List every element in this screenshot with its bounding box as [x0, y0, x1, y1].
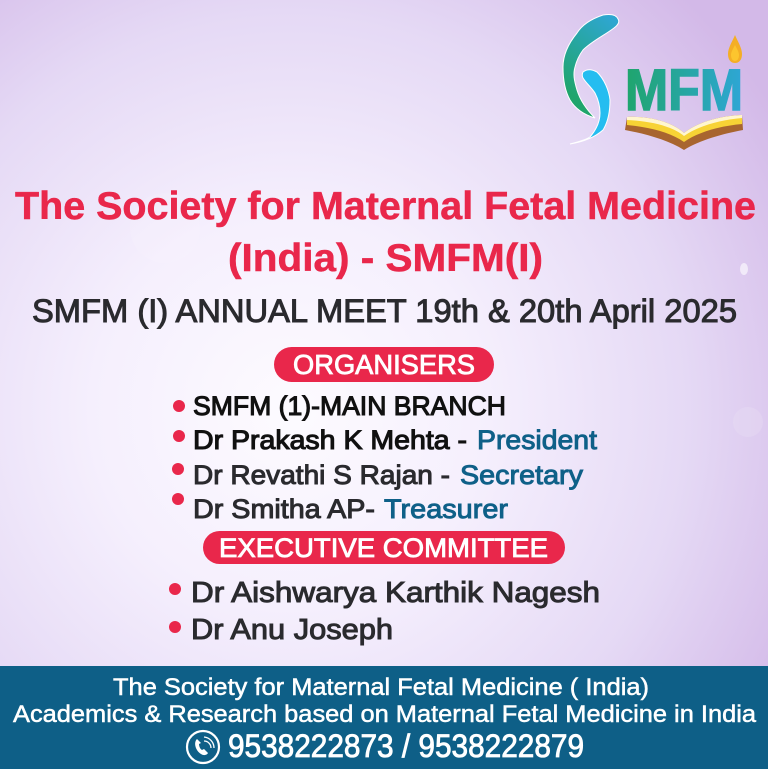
event date subtitle: SMFM (I) ANNUAL MEET 19th & 20th April 2025 [32, 293, 737, 329]
member: Anu: Dr Anu Joseph [191, 614, 393, 646]
item: president: Dr Prakash K Mehta - [193, 425, 467, 455]
item: secretary [172, 460, 584, 490]
item: treasurer: Treasurer [384, 494, 508, 524]
icon: phone [187, 731, 219, 763]
logo open book [625, 115, 743, 150]
title line 1: The Society for Maternal Fetal Medicine [15, 185, 756, 228]
logo: SMFM [563, 14, 743, 150]
logo blue swoosh [570, 70, 610, 144]
item: treasurer: Dr Smitha AP- [193, 494, 375, 524]
footer band [0, 666, 768, 769]
item: secretary: Secretary [460, 460, 584, 490]
organisers list [172, 391, 598, 524]
executive committee heading pill: EXECUTIVE COMMITTEE [219, 533, 548, 563]
executive committee list [169, 577, 600, 646]
logo green swoosh [563, 14, 619, 118]
item: president [173, 425, 598, 455]
item: president: President [477, 425, 598, 455]
organisers heading pill: ORGANISERS [293, 349, 475, 380]
item: treasurer [172, 493, 508, 524]
phone numbers: 9538222873 / 9538222879 [228, 728, 584, 764]
member: Aishwarya: Dr Aishwarya Karthik Nagesh [191, 577, 600, 609]
item: main branch: SMFM (1)-MAIN BRANCH [193, 391, 506, 421]
logo letters MFM: MFM [625, 58, 743, 123]
item: secretary: Dr Revathi S Rajan - [193, 460, 450, 490]
footer line 1: The Society for Maternal Fetal Medicine ( India) [113, 674, 649, 701]
logo flame [728, 35, 742, 63]
footer line 2: Academics & Research based on Maternal Fetal Medicine in India [13, 701, 757, 728]
title [15, 185, 756, 280]
title line 2: (India) - SMFM(I) [228, 237, 543, 280]
